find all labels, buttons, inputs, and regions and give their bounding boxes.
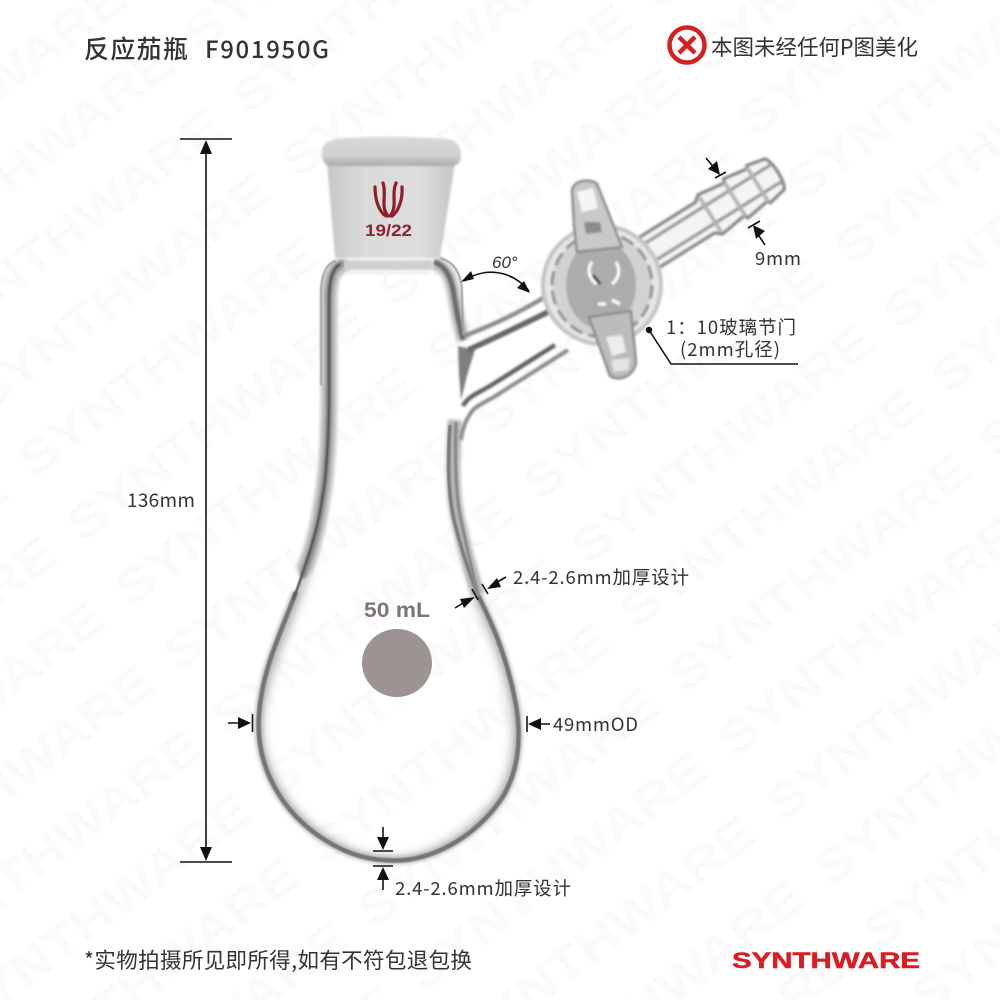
notice: no retouching — [670, 28, 918, 62]
stopcock callout text: (2mm孔径) — [680, 336, 780, 362]
stopcock plug — [566, 241, 636, 329]
wall thickness arrows side — [455, 577, 506, 608]
height label: 136mm — [127, 486, 195, 513]
outer diameter arrows — [228, 714, 550, 732]
angle label: 60° — [492, 253, 518, 272]
brand logo SYNTHWARE: SYNTHWARE — [732, 948, 920, 973]
inner glow of glass — [257, 560, 519, 863]
stopcock — [543, 153, 790, 378]
logo: tulip mark — [375, 183, 402, 216]
flask photo — [257, 137, 790, 863]
right neck wall — [434, 258, 463, 340]
flask body — [257, 258, 568, 863]
hose barb tube — [634, 153, 790, 274]
outer diameter label: 49mmOD — [553, 711, 638, 737]
stopcock callout line — [646, 327, 798, 364]
stopcock barrel ring — [543, 226, 661, 344]
title: 反应茄瓶 — [84, 30, 188, 66]
lower right thick wall — [449, 420, 478, 595]
fin at side arm joint — [458, 346, 475, 400]
frosted writing spot — [362, 629, 432, 697]
height dimension arrow — [180, 139, 232, 862]
stopcock callout text: 1：10玻璃节门 — [666, 314, 796, 340]
left neck wall — [293, 261, 342, 600]
shoulder highlights — [344, 265, 432, 273]
hose diameter arrows — [706, 158, 765, 245]
footnote: *实物拍摄所见即所得,如有不符包退包换 — [84, 944, 472, 975]
icon: red cross circle — [670, 28, 704, 62]
angle arrow 60 degrees — [461, 271, 530, 293]
title: F901950G — [205, 30, 329, 65]
lower handle — [589, 311, 636, 378]
side arm tubes — [461, 297, 568, 440]
hose diameter label: 9mm — [755, 245, 801, 271]
title — [84, 30, 329, 66]
bottom thickness label: 2.4-2.6mm加厚设计 — [395, 875, 571, 901]
ground glass joint — [322, 137, 461, 258]
stopcock callout text — [666, 314, 796, 362]
upper handle — [572, 181, 622, 252]
joint size 19/22: 19/22 — [365, 221, 412, 240]
wall thickness label side: 2.4-2.6mm加厚设计 — [513, 564, 689, 590]
volume label 50 mL: 50 mL — [364, 599, 430, 622]
notice text: 本图未经任何P图美化 — [711, 31, 918, 62]
bottom thickness arrows — [373, 827, 393, 890]
flask wall lower — [259, 592, 519, 860]
